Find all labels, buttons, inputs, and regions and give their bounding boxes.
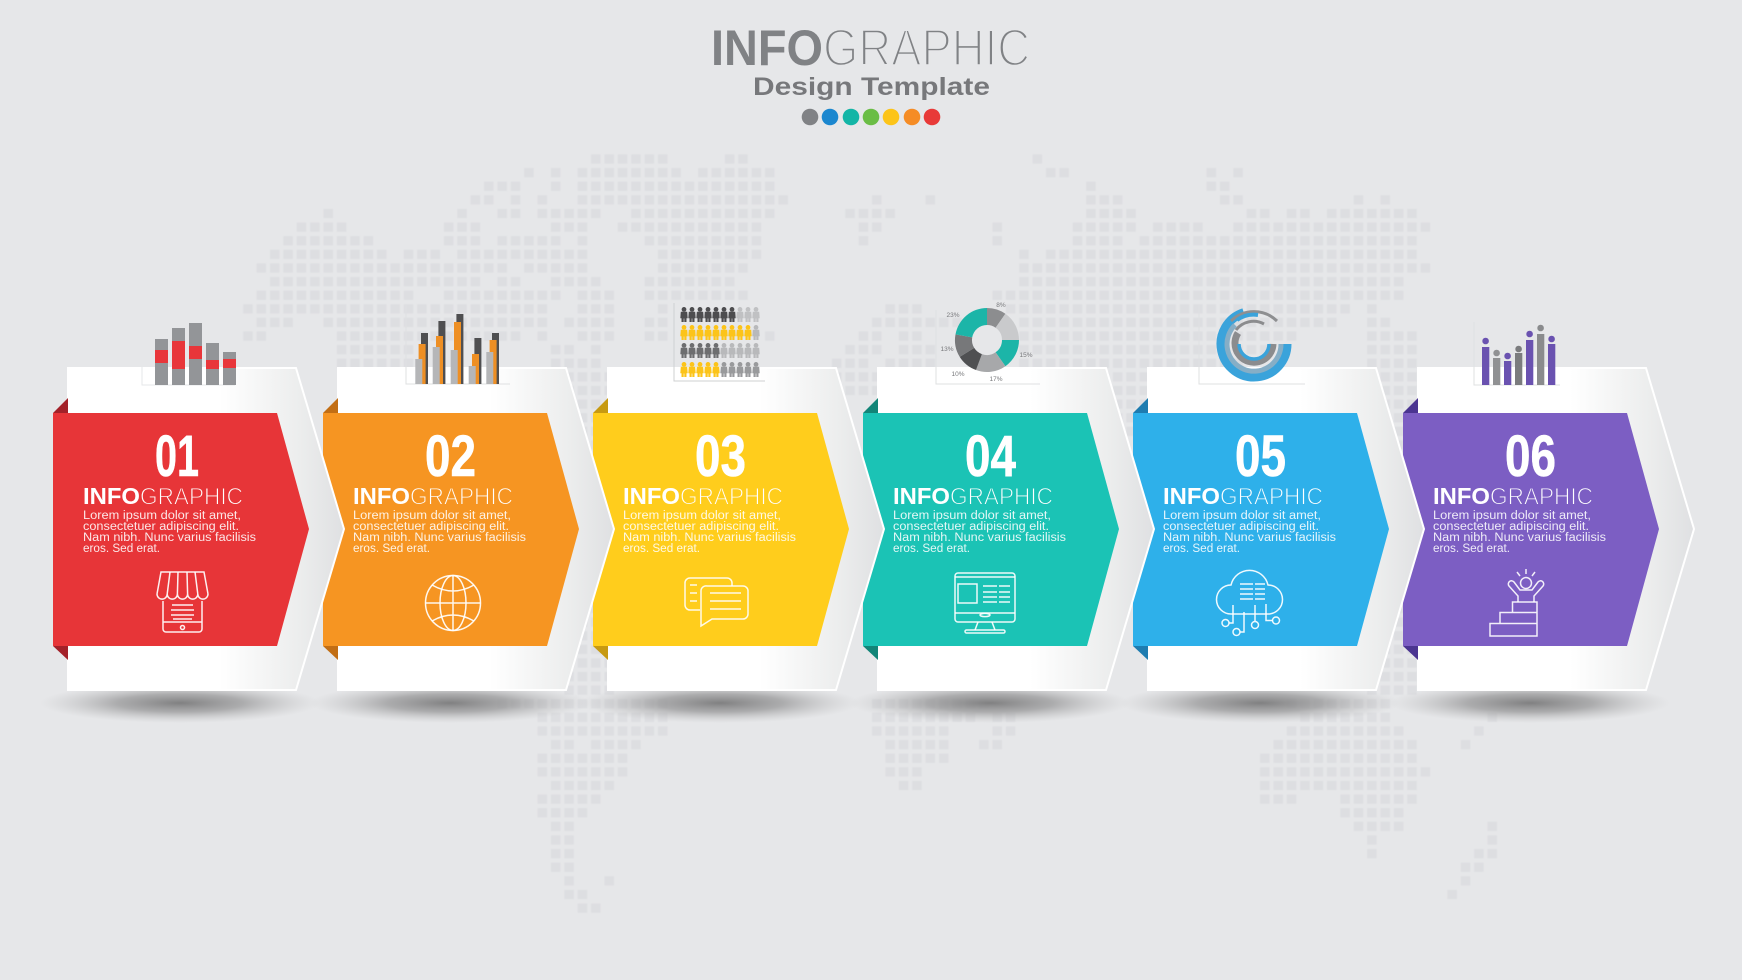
colour dots [802, 109, 940, 125]
title: INFO [711, 20, 823, 76]
body text: eros. Sed erat. [1433, 543, 1510, 555]
chart: people pictogram [674, 303, 765, 381]
people row 2 [680, 325, 760, 340]
subtitle: Design Template [753, 73, 990, 101]
fold corners [593, 398, 608, 660]
chart labels: 13% [940, 346, 954, 353]
white arrow card [338, 368, 614, 690]
fold corners [1403, 398, 1418, 660]
body text [83, 510, 256, 555]
body text [1163, 510, 1336, 555]
white arrow card [878, 368, 1154, 690]
heading [83, 483, 243, 510]
icon: cloud network [1216, 570, 1282, 636]
ribbon [593, 413, 849, 646]
title [711, 20, 1030, 78]
icon: person on steps [1490, 569, 1544, 636]
heading: GRAPHIC [1490, 483, 1593, 510]
panel: step 03 [593, 303, 884, 690]
title: GRAPHIC [823, 20, 1030, 78]
heading: INFO [623, 483, 680, 509]
people row 1 [680, 307, 760, 322]
body text: consectetuer adipiscing elit. [623, 521, 779, 533]
heading: INFO [1163, 483, 1220, 509]
heading: GRAPHIC [680, 483, 783, 510]
body text: Nam nibh. Nunc varius facilisis [1163, 532, 1336, 544]
body text: Lorem ipsum dolor sit amet, [623, 510, 781, 522]
panel: step 06 [1403, 322, 1694, 690]
ribbon [1133, 413, 1389, 646]
heading: INFO [353, 483, 410, 509]
body text: eros. Sed erat. [83, 543, 160, 555]
body text [893, 510, 1066, 555]
chart: radial arcs [1199, 305, 1305, 384]
ribbon [863, 413, 1119, 646]
chart labels: 8% [996, 302, 1006, 309]
body text: consectetuer adipiscing elit. [1433, 521, 1589, 533]
white arrow card [1418, 368, 1694, 690]
number: 04 [965, 424, 1016, 489]
heading: GRAPHIC [410, 483, 513, 510]
ribbon [53, 413, 309, 646]
chart labels: 23% [946, 312, 960, 319]
heading: GRAPHIC [1220, 483, 1323, 510]
body text: eros. Sed erat. [353, 543, 430, 555]
number: 06 [1505, 424, 1556, 489]
body text: Nam nibh. Nunc varius facilisis [353, 532, 526, 544]
icon: desktop monitor [955, 573, 1015, 633]
body text: consectetuer adipiscing elit. [83, 521, 239, 533]
body text: Nam nibh. Nunc varius facilisis [893, 532, 1066, 544]
body text: Lorem ipsum dolor sit amet, [1163, 510, 1321, 522]
body text: eros. Sed erat. [623, 543, 700, 555]
heading [1433, 483, 1593, 510]
body text: Lorem ipsum dolor sit amet, [893, 510, 1051, 522]
body text: consectetuer adipiscing elit. [353, 521, 509, 533]
heading: INFO [83, 483, 140, 509]
heading: INFO [1433, 483, 1490, 509]
chart: lollipop bars [1474, 322, 1560, 385]
people row 3 [680, 343, 760, 358]
chart labels: 17% [989, 376, 1003, 383]
chart labels: 10% [951, 371, 965, 378]
number: 01 [155, 424, 199, 489]
body text: Lorem ipsum dolor sit amet, [353, 510, 511, 522]
body text: Nam nibh. Nunc varius facilisis [83, 532, 256, 544]
number: 05 [1235, 424, 1286, 489]
fold corners [1133, 398, 1148, 660]
heading [893, 483, 1053, 510]
fold corners [323, 398, 338, 660]
heading: GRAPHIC [950, 483, 1053, 510]
icon: chat bubbles [685, 578, 748, 626]
chart: donut [936, 302, 1040, 384]
chart labels [940, 302, 1033, 383]
number: 03 [695, 424, 746, 489]
chart: stacked bars [142, 318, 236, 385]
body text: eros. Sed erat. [1163, 543, 1240, 555]
heading: INFO [893, 483, 950, 509]
people row 4 [680, 362, 760, 377]
panel: step 05 [1133, 305, 1424, 690]
icon: mobile shop [157, 572, 208, 632]
dotted world map [243, 159, 1501, 908]
body text [353, 510, 526, 555]
white arrow card [68, 368, 344, 690]
heading: GRAPHIC [140, 483, 243, 510]
body text: eros. Sed erat. [893, 543, 970, 555]
body text: Nam nibh. Nunc varius facilisis [623, 532, 796, 544]
heading [623, 483, 783, 510]
body text [1433, 510, 1606, 555]
body text: consectetuer adipiscing elit. [893, 521, 1049, 533]
body text: consectetuer adipiscing elit. [1163, 521, 1319, 533]
icon: globe [426, 576, 480, 630]
heading [353, 483, 513, 510]
white arrow card [1148, 368, 1424, 690]
chart: grouped bars [406, 305, 510, 384]
body text [623, 510, 796, 555]
heading [1163, 483, 1323, 510]
fold corners [53, 398, 68, 660]
body text: Nam nibh. Nunc varius facilisis [1433, 532, 1606, 544]
body text: Lorem ipsum dolor sit amet, [83, 510, 241, 522]
fold corners [863, 398, 878, 660]
body text: Lorem ipsum dolor sit amet, [1433, 510, 1591, 522]
chart labels: 15% [1019, 352, 1033, 359]
card shadows [40, 683, 1670, 723]
ribbon [323, 413, 579, 646]
panel: step 04 [863, 302, 1154, 690]
panel: step 01 [53, 318, 344, 690]
ribbon [1403, 413, 1659, 646]
number: 02 [425, 424, 476, 489]
panel: step 02 [323, 305, 614, 690]
white arrow card [608, 368, 884, 690]
